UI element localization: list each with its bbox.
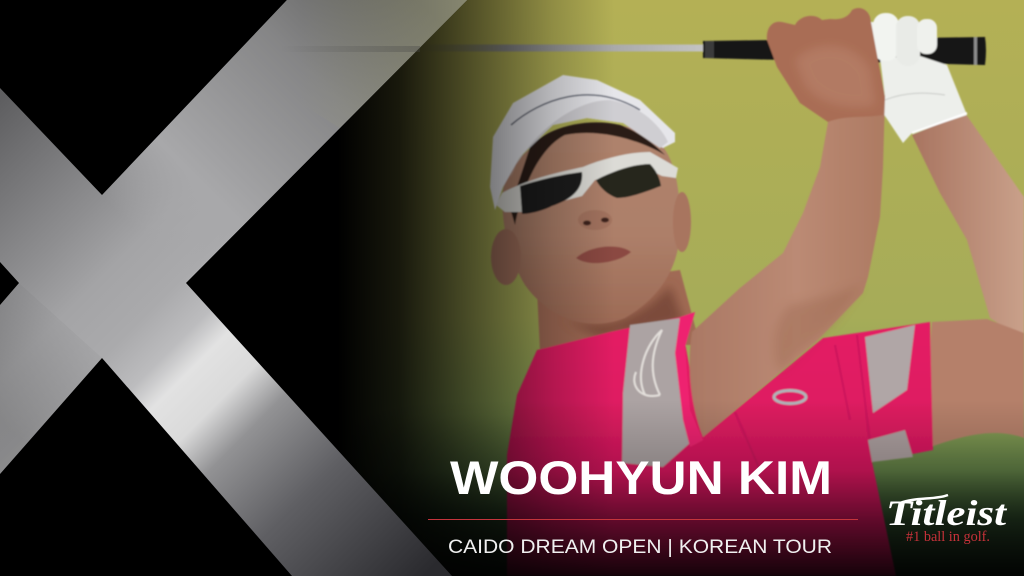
face [502, 125, 680, 324]
hand [767, 8, 885, 122]
hair [510, 122, 665, 225]
lips [576, 246, 631, 263]
golf club [420, 37, 986, 65]
elbow shading [775, 285, 862, 372]
silver X graphic [0, 0, 467, 576]
Titleist logo: #1 ball in golf. [906, 529, 990, 545]
Titleist logo: Titleist [886, 493, 1007, 533]
golfer photo [420, 8, 1024, 576]
far arm [912, 113, 1024, 450]
chest logo [774, 390, 806, 404]
Titleist logo [886, 493, 1007, 545]
pink shirt [507, 317, 933, 576]
grey sleeve panel with logo [622, 318, 690, 467]
tournament line: CAIDO DREAM OPEN | KOREAN TOUR [448, 536, 832, 558]
bottom black fade [0, 400, 1024, 576]
nose [578, 210, 612, 230]
neck [537, 270, 700, 352]
divider [428, 519, 858, 520]
right mesh panels [865, 325, 915, 413]
player name: WOOHYUN KIM [450, 451, 832, 504]
sunglasses [496, 152, 678, 214]
near arm [690, 97, 885, 437]
shirt folds [735, 335, 872, 470]
glove [862, 13, 967, 143]
sleeve trim [675, 312, 703, 447]
cap [490, 75, 675, 210]
